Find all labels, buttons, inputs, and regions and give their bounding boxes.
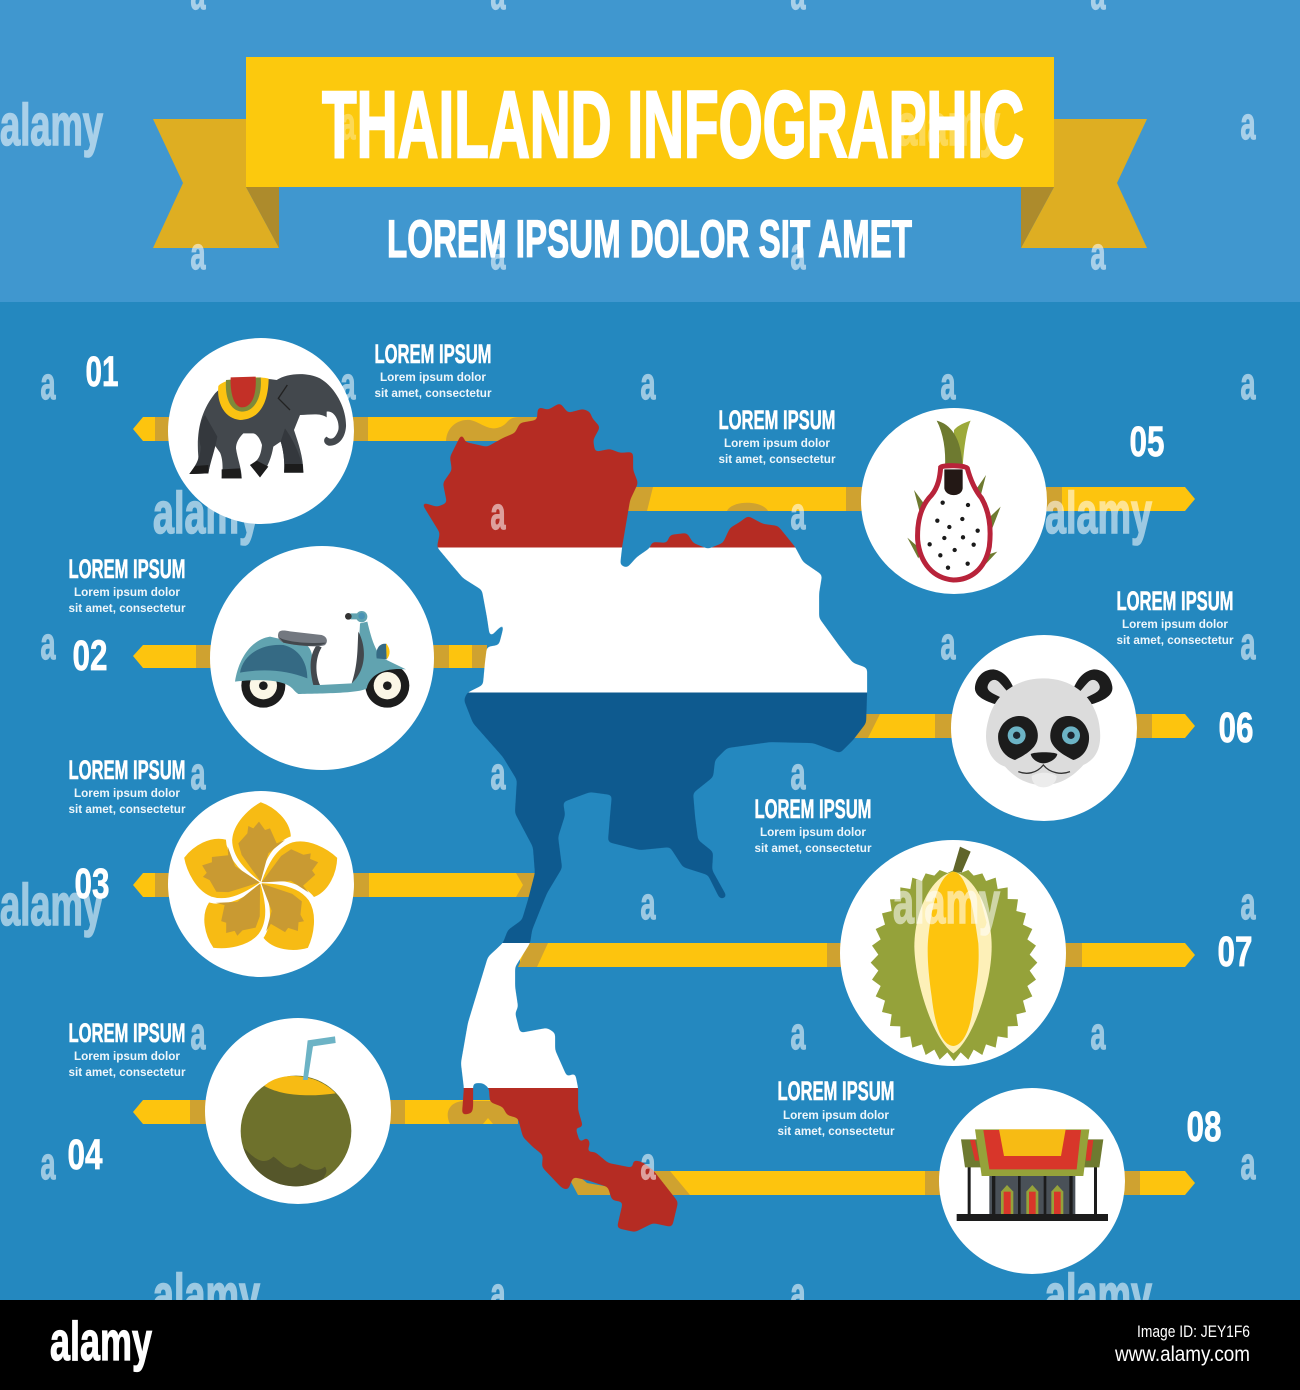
watermarks: a [790, 1268, 806, 1319]
text block 01: LOREM IPSUM [374, 339, 492, 369]
footer bar [0, 1300, 1300, 1390]
watermarks: a [790, 1008, 806, 1059]
panel 01: elephant [168, 338, 354, 524]
watermarks: alamy [0, 873, 103, 938]
text block 03 [68, 755, 186, 816]
watermarks: alamy [1045, 481, 1152, 546]
step numbers: 04 [68, 1131, 103, 1179]
text block 05: Lorem ipsum dolor [724, 436, 830, 450]
watermarks: a [40, 358, 56, 409]
watermarks: a [640, 618, 656, 669]
watermarks: a [1090, 1008, 1106, 1059]
bar 06 [850, 714, 1195, 738]
icon: coconut [241, 1036, 351, 1186]
watermarks: alamy [153, 1263, 260, 1328]
circle 07 [840, 840, 1066, 1066]
watermarks: a [640, 358, 656, 409]
watermarks: a [340, 358, 356, 409]
icon: dragon fruit [907, 421, 1001, 580]
text block 05: sit amet, consectetur [718, 452, 836, 466]
watermarks: a [790, 748, 806, 799]
text block 02: LOREM IPSUM [68, 554, 186, 584]
watermarks: a [790, 488, 806, 539]
bar 02 [133, 645, 487, 668]
step numbers [68, 348, 1254, 1179]
bar 04 [133, 1100, 518, 1124]
circle 04 [205, 1018, 391, 1204]
watermarks: a [1240, 1138, 1256, 1189]
text block 06: sit amet, consectetur [1116, 633, 1234, 647]
Thailand map in flag colours [424, 404, 868, 1232]
watermarks: a [1240, 358, 1256, 409]
text block 08: Lorem ipsum dolor [783, 1108, 889, 1122]
watermarks: a [490, 228, 506, 279]
header band [0, 0, 1300, 302]
watermarks: a [1240, 618, 1256, 669]
text block 02 [68, 554, 186, 615]
watermarks: a [940, 358, 956, 409]
watermarks: a [640, 1138, 656, 1189]
icon: elephant [189, 374, 346, 478]
step numbers: 07 [1218, 928, 1252, 976]
watermarks: a [490, 748, 506, 799]
text block 06: Lorem ipsum dolor [1122, 617, 1228, 631]
text block 03: LOREM IPSUM [68, 755, 186, 785]
watermarks: a [1240, 878, 1256, 929]
text block 05: LOREM IPSUM [718, 405, 836, 435]
bar 08 [570, 1171, 1195, 1195]
icon: temple [957, 1129, 1108, 1221]
watermarks: a [1240, 98, 1256, 149]
ribbon right fold [1021, 187, 1054, 248]
watermarks: alamy [893, 871, 1000, 936]
watermarks: a [490, 1268, 506, 1319]
watermarks: a [490, 488, 506, 539]
circle 05 [861, 408, 1047, 594]
text block 01 [374, 339, 492, 400]
text block 08 [778, 1076, 895, 1138]
circle 01 [168, 338, 354, 524]
step numbers: 01 [86, 348, 118, 396]
watermarks: alamy [897, 93, 1000, 158]
text block 05 [718, 405, 836, 466]
panel 08: temple [939, 1088, 1125, 1274]
watermarks: a [190, 228, 206, 279]
panel 06: panda [951, 635, 1137, 821]
bar 03 [133, 873, 541, 897]
circle 06 [951, 635, 1137, 821]
text block 02: Lorem ipsum dolor [74, 585, 180, 599]
watermarks: a [340, 98, 356, 149]
panel 02: scooter [210, 546, 434, 770]
step numbers: 05 [1130, 418, 1164, 466]
watermarks: a [40, 1138, 56, 1189]
text block 04: Lorem ipsum dolor [74, 1049, 180, 1063]
watermarks: alamy [0, 93, 103, 158]
text block 07 [754, 794, 872, 855]
step numbers: 06 [1218, 704, 1254, 752]
footer logo: alamy [50, 1310, 152, 1372]
circle 02 [210, 546, 434, 770]
text block 08: LOREM IPSUM [778, 1076, 894, 1106]
text block 07: sit amet, consectetur [754, 841, 872, 855]
watermarks: a [40, 618, 56, 669]
icon: panda [975, 669, 1112, 787]
watermarks: a [790, 228, 806, 279]
bar 01 [133, 417, 538, 441]
panel 04: coconut [205, 1018, 391, 1204]
step numbers: 02 [72, 632, 108, 680]
text block 04 [68, 1018, 186, 1079]
step numbers: 08 [1186, 1103, 1222, 1151]
title ribbon [153, 57, 1147, 248]
panel 05: dragon fruit [861, 408, 1047, 594]
text block 04: LOREM IPSUM [68, 1018, 186, 1048]
text block 07: Lorem ipsum dolor [760, 825, 866, 839]
panel 03: frangipani flower [168, 791, 354, 977]
watermarks: a [190, 748, 206, 799]
text block 08: sit amet, consectetur [778, 1124, 895, 1138]
ribbon left tail [153, 119, 279, 248]
ribbon left fold [246, 187, 279, 248]
watermarks: a [640, 878, 656, 929]
watermarks: a [490, 1008, 506, 1059]
subtitle: LOREM IPSUM DOLOR SIT AMET [387, 210, 912, 269]
text block 03: Lorem ipsum dolor [74, 786, 180, 800]
text block 03: sit amet, consectetur [68, 802, 186, 816]
bar 05 [625, 487, 1195, 511]
icon: flower [175, 802, 347, 966]
ribbon main band [246, 57, 1054, 187]
text block 06 [1116, 586, 1234, 647]
watermarks: a [940, 618, 956, 669]
text block 01: Lorem ipsum dolor [380, 370, 486, 384]
icon: scooter [235, 611, 409, 708]
connector bars [133, 417, 1195, 1195]
text block 01: sit amet, consectetur [374, 386, 492, 400]
watermarks: a [1090, 228, 1106, 279]
watermarks: alamy [153, 481, 260, 546]
text block 07: LOREM IPSUM [754, 794, 872, 824]
website: www.alamy.com [1114, 1343, 1250, 1366]
circle 08 [939, 1088, 1125, 1274]
panel 07: durian [840, 840, 1066, 1066]
step numbers: 03 [74, 860, 110, 908]
text block 02: sit amet, consectetur [68, 601, 186, 615]
circle 03 [168, 791, 354, 977]
text block 04: sit amet, consectetur [68, 1065, 186, 1079]
watermarks: a [190, 1008, 206, 1059]
watermarks: alamy [1045, 1263, 1152, 1328]
watermarks: a [1090, 748, 1106, 799]
bar 07 [518, 943, 1195, 967]
image id: Image ID: JEY1F6 [1137, 1322, 1250, 1341]
ribbon right tail [1021, 119, 1147, 248]
icon: durian [871, 847, 1037, 1061]
